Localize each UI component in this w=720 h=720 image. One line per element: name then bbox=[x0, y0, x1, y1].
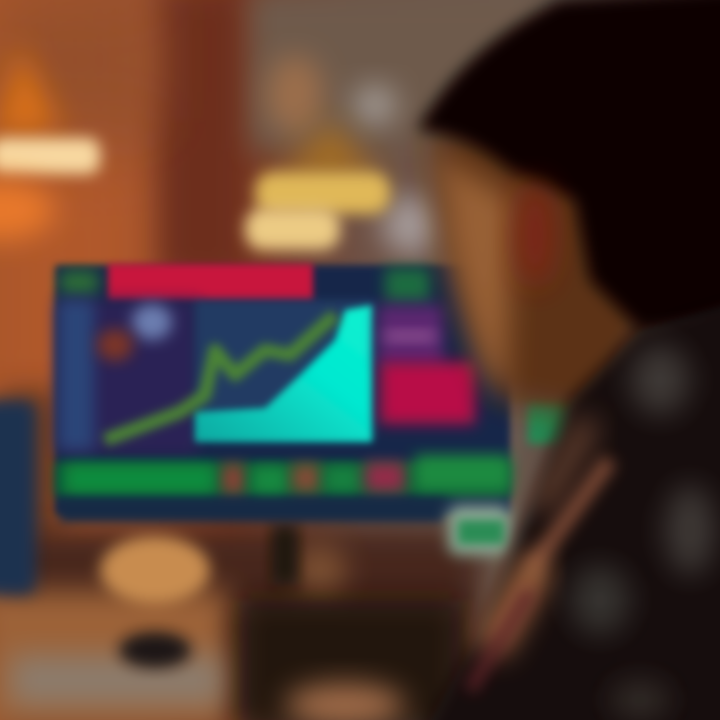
left dark monitor edge bbox=[0, 400, 36, 595]
hair bbox=[418, 0, 720, 330]
green trend line bbox=[105, 315, 335, 440]
teal area chart bbox=[195, 305, 372, 442]
desk and foreground bbox=[0, 525, 480, 720]
face and neck bbox=[430, 120, 660, 415]
phone and small green widgets bbox=[448, 402, 570, 555]
person silhouette bbox=[418, 0, 720, 720]
ear bbox=[515, 183, 555, 287]
torso bbox=[420, 300, 720, 720]
monitor with chart bbox=[55, 264, 510, 522]
center lamp bbox=[245, 120, 390, 250]
red header bar bbox=[108, 264, 313, 300]
center chart panel bbox=[195, 300, 375, 440]
green corner tabs bbox=[60, 270, 98, 296]
green ticker row bbox=[55, 462, 510, 496]
bottom bezel bbox=[60, 498, 445, 522]
monitor panel bbox=[55, 265, 510, 515]
left lamp bbox=[0, 45, 100, 240]
right magenta panel bbox=[378, 305, 443, 365]
plaid highlights on shirt bbox=[540, 420, 590, 510]
left chart panel bbox=[58, 300, 198, 455]
